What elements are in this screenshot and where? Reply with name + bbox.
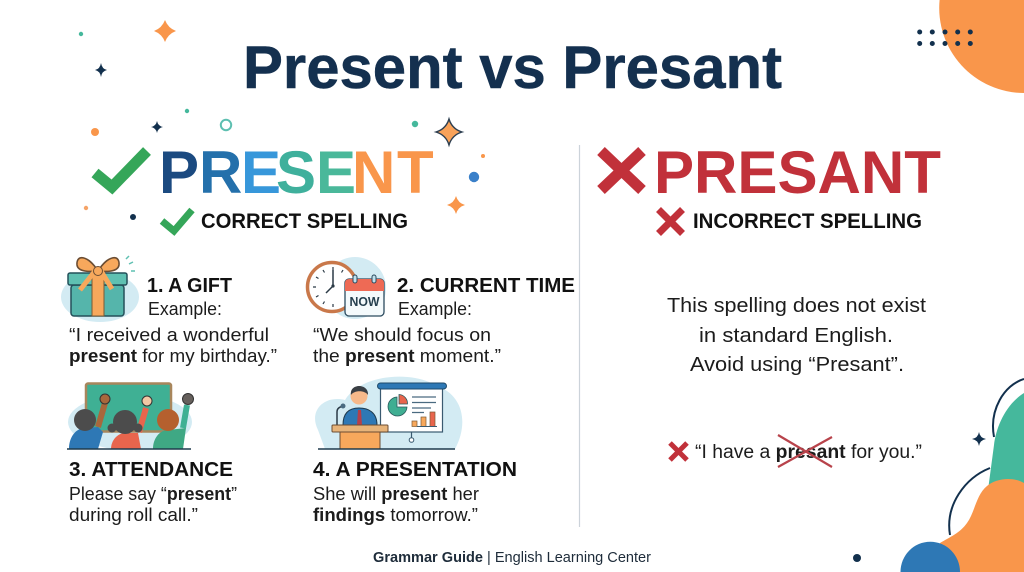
text block: current time: Example: (398, 299, 472, 319)
icon: large red cross (601, 151, 642, 190)
icon: clock and calendar: NOW (350, 295, 380, 309)
text block: a gift: Example: (148, 299, 222, 319)
decoration: dot grid (917, 30, 973, 46)
subheading: incorrect spelling: INCORRECT SPELLING (693, 210, 922, 233)
panel: correct spelling header (95, 139, 434, 233)
text block: attendance: Please say “present” (69, 483, 237, 504)
icon: small green check (162, 210, 192, 231)
text block: a presentation: She will present her (313, 483, 479, 504)
text block: current time: the present moment.” (313, 345, 501, 366)
text block: a gift: 1. A GIFT (147, 275, 232, 297)
text block: current time: 2. CURRENT TIME (397, 275, 575, 297)
icon: clock and calendar (308, 257, 386, 319)
icon: strike-through on presant (778, 435, 832, 467)
icon: large green check (95, 151, 147, 187)
text block: current time (313, 275, 575, 366)
panel: incorrect spelling (601, 139, 941, 467)
footer: Grammar Guide | English Learning Center (373, 550, 651, 566)
text block: attendance: 3. ATTENDANCE (69, 459, 233, 481)
decoration: top right orange circle (939, 0, 1024, 93)
text block: explanation: Avoid using “Presant”. (690, 353, 904, 376)
text block: explanation (667, 294, 926, 376)
icon: presentation (315, 377, 462, 449)
text block: current time: “We should focus on (313, 324, 491, 345)
text block: a presentation: findings tomorrow.” (313, 504, 478, 525)
icon: gift (61, 256, 139, 322)
text block: attendance: during roll call.” (69, 504, 198, 525)
decoration: sparkles left (79, 20, 485, 220)
heading: PRESENT: E (316, 139, 356, 206)
text block: a presentation (313, 459, 517, 525)
heading: PRESENT: R (199, 139, 242, 206)
heading: PRESENT: P (159, 139, 199, 206)
text block: explanation: This spelling does not exist (667, 294, 926, 317)
text block: explanation: in standard English. (699, 324, 893, 347)
icon: classroom attendance (67, 384, 194, 450)
text block: a gift: “I received a wonderful (69, 324, 269, 345)
heading: PRESANT: PRESANT (654, 139, 941, 206)
icon: example red cross (670, 443, 687, 460)
heading: PRESENT: T (397, 139, 434, 206)
subheading: correct spelling: CORRECT SPELLING (201, 210, 408, 233)
text block: incorrect example: “I have a presant for you.” (695, 442, 922, 463)
title: Present vs Presant (243, 34, 782, 101)
icon: small red cross (658, 210, 682, 234)
heading: PRESENT: E (241, 139, 281, 206)
text block: attendance (69, 459, 237, 525)
decoration: bottom right shapes (853, 379, 1024, 572)
text block: a gift (69, 275, 277, 366)
heading: PRESENT: S (276, 139, 316, 206)
heading: PRESENT: N (352, 139, 395, 206)
text block: a gift: present for my birthday.” (69, 345, 277, 366)
text block: a presentation: 4. A PRESENTATION (313, 459, 517, 481)
